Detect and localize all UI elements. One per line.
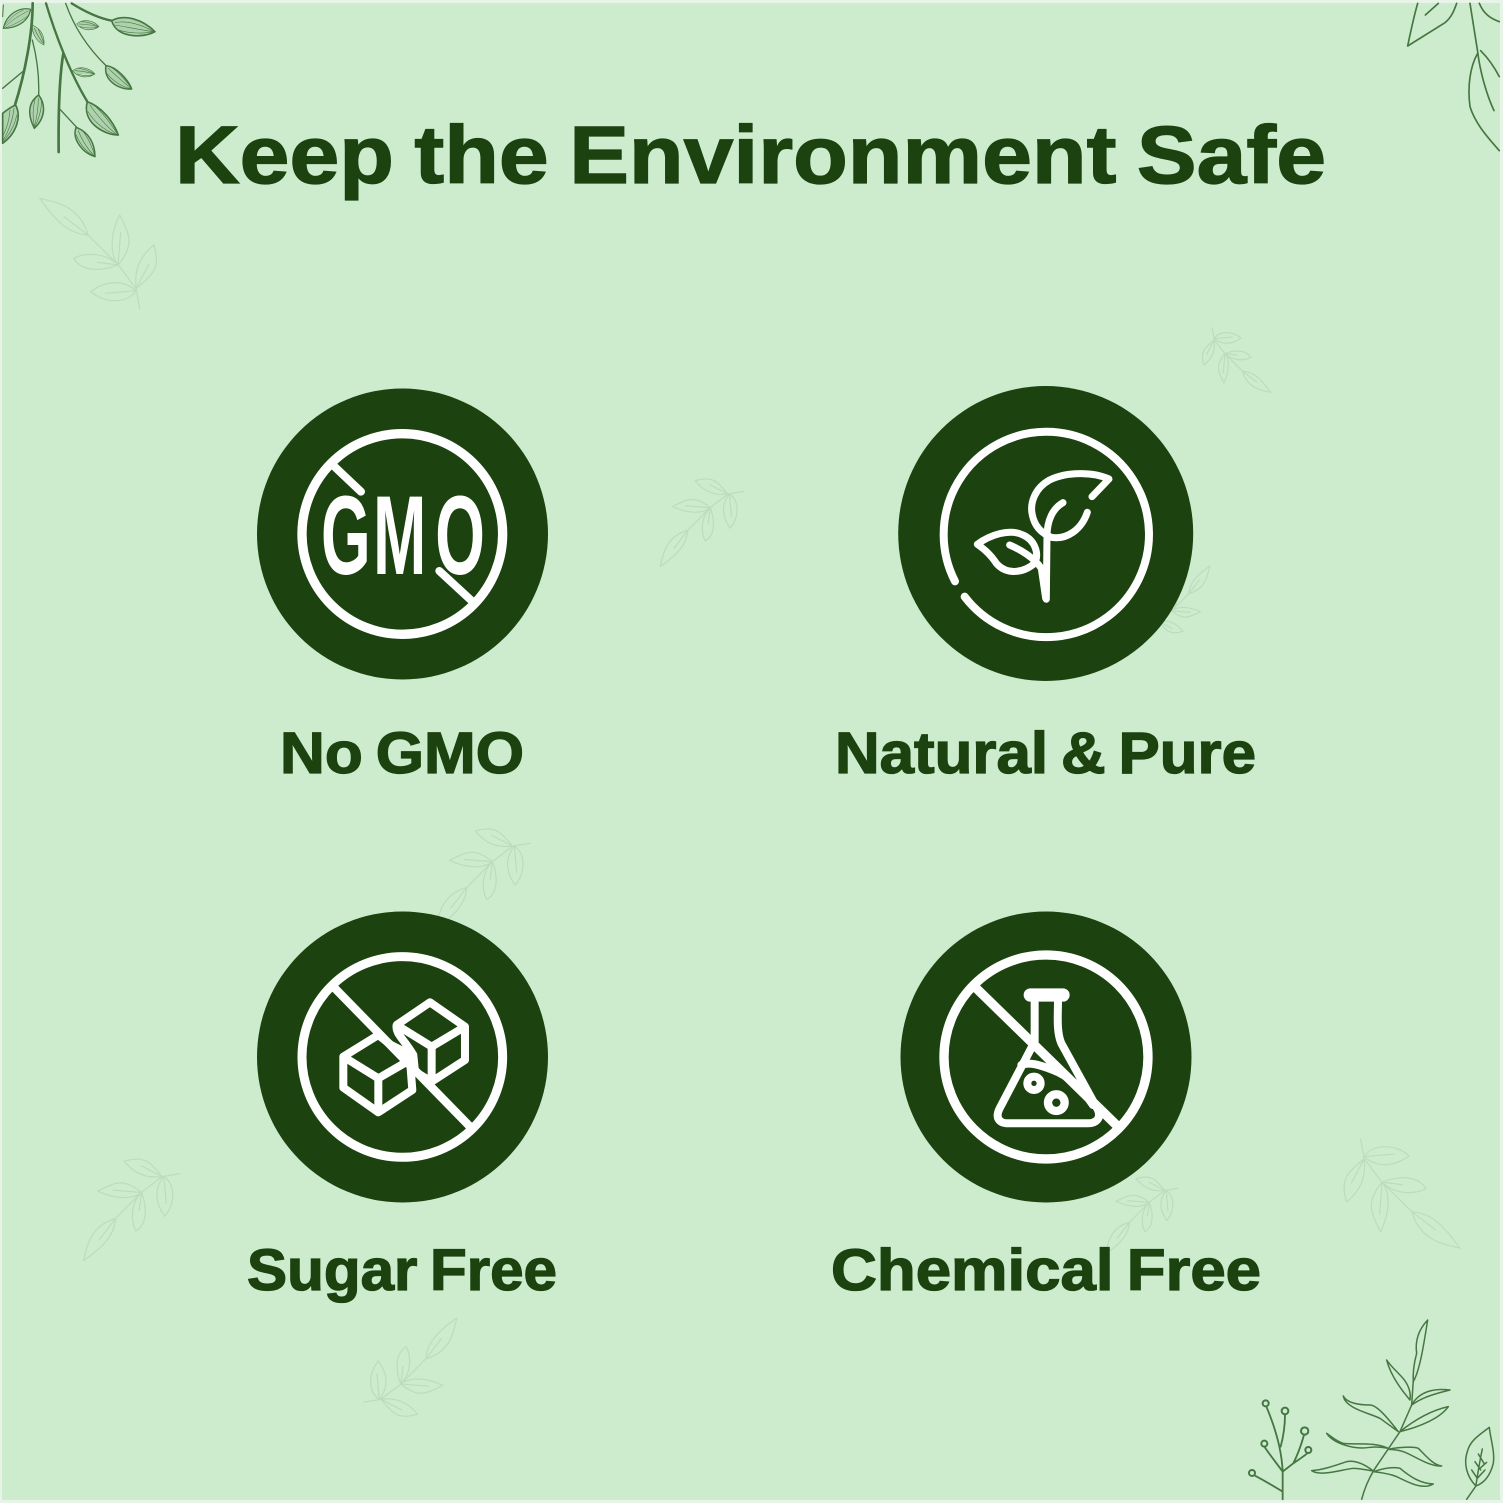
icon: faint leaf lower left bbox=[84, 1159, 180, 1261]
icon: flask circle bbox=[900, 912, 1192, 1202]
icon: top-right branch bbox=[1408, 3, 1499, 151]
icon: GMO circle bbox=[257, 388, 548, 680]
heading: No GMO: No GMO bbox=[280, 721, 524, 786]
panel: Natural & Pure bbox=[835, 386, 1256, 786]
icon: faint leaf bottom bbox=[364, 1318, 457, 1416]
panel: No GMO bbox=[257, 388, 548, 786]
heading: Sugar Free: Sugar Free bbox=[247, 1238, 557, 1303]
heading: Chemical Free: Chemical Free bbox=[831, 1238, 1261, 1303]
icon: bud stem bbox=[1249, 1400, 1311, 1499]
panel: Chemical Free bbox=[831, 912, 1261, 1303]
icon: faint leaf above sugar circle bbox=[435, 829, 530, 929]
icon: faint leaf upper left bbox=[40, 198, 156, 309]
icon: small leaf bbox=[1466, 1427, 1494, 1499]
icon: sprout circle bbox=[898, 386, 1193, 681]
icon: faint leaf right bbox=[1344, 1139, 1460, 1248]
icon: faint leaf behind chemical label bbox=[1105, 1177, 1178, 1254]
icon: top-left branch bbox=[3, 3, 155, 157]
icon: sugar cubes circle bbox=[257, 912, 548, 1202]
icon: faint leaf upper right bbox=[1202, 328, 1271, 393]
title: Keep the Environment Safe bbox=[175, 110, 1326, 201]
heading: Natural & Pure: Natural & Pure bbox=[835, 721, 1256, 786]
icon: GMO circle: GMO bbox=[321, 473, 485, 599]
icon: faint leaf behind natural circle bbox=[1147, 566, 1210, 633]
icon: faint leaf centre bbox=[660, 479, 743, 566]
icon: fern bbox=[1312, 1320, 1450, 1499]
icon: bottom-right plants bbox=[1249, 1320, 1494, 1499]
panel: Sugar Free bbox=[247, 912, 557, 1303]
